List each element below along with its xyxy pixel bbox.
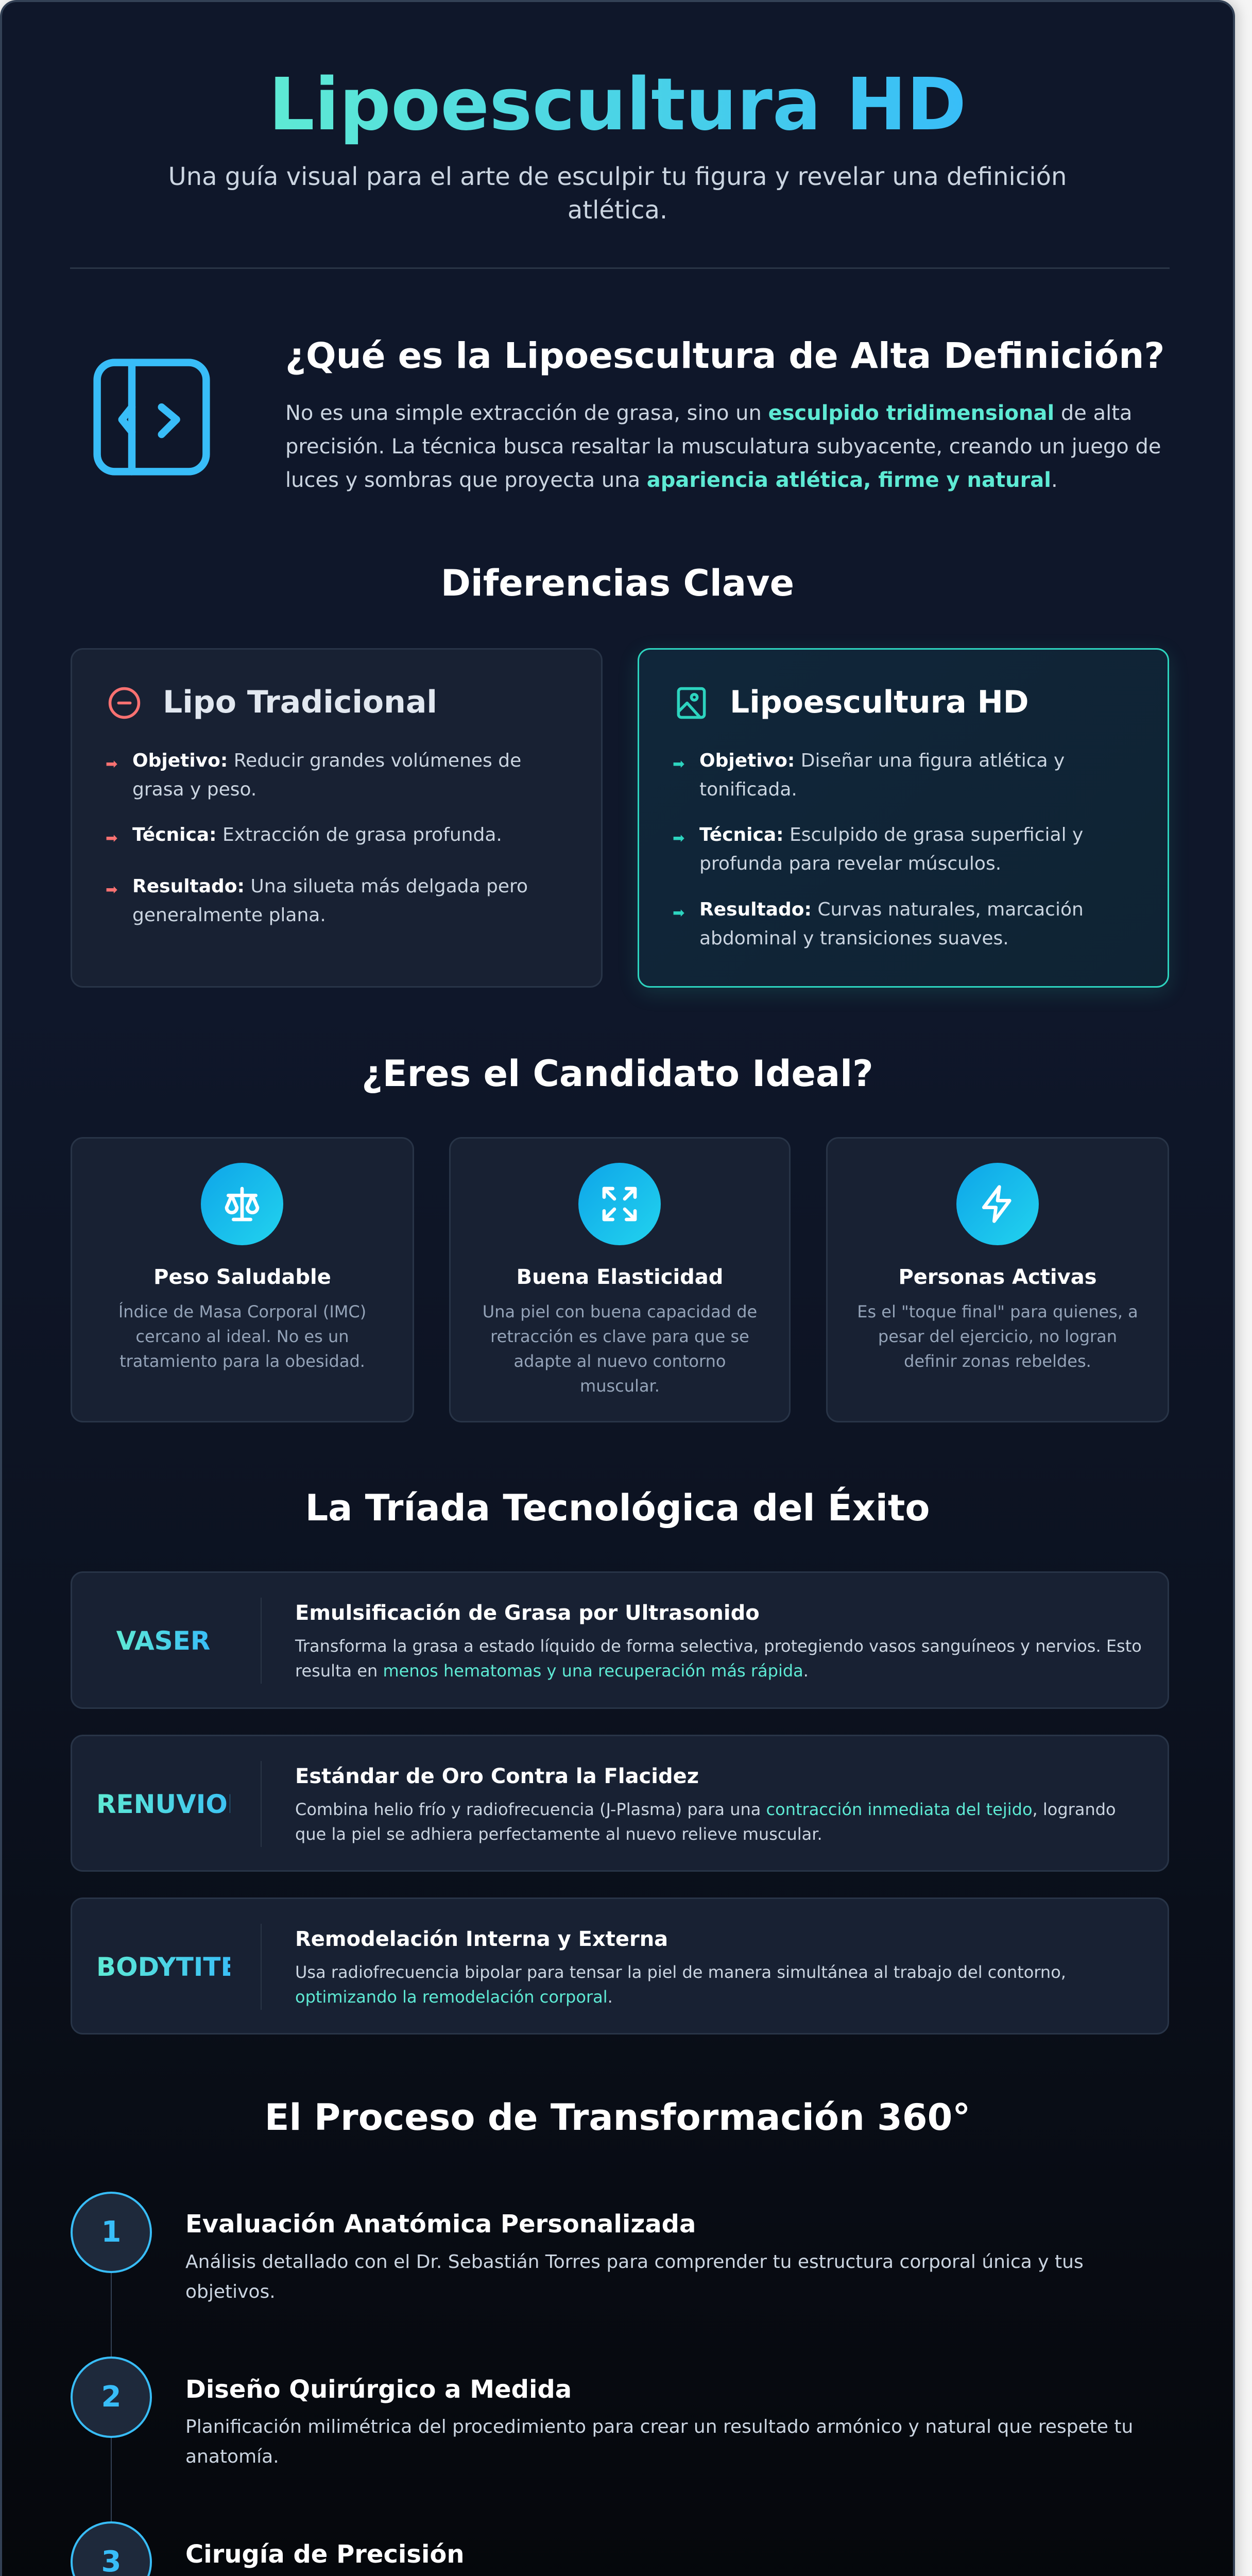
panel: buena elasticidad xyxy=(449,1137,791,1422)
list items: Objetivo: Reducir grandes volúmenes de xyxy=(132,750,521,771)
step 1 xyxy=(71,2192,1084,2302)
panel: lipoescultura HD xyxy=(638,648,1169,988)
desc: cercano al ideal. No es un xyxy=(135,1327,349,1346)
step 3: Cirugía de Precisión xyxy=(185,2540,465,2569)
list items xyxy=(673,750,1084,949)
desc: adapte al nuevo contorno xyxy=(514,1351,726,1371)
step 1: objetivos. xyxy=(185,2281,276,2302)
desc xyxy=(295,1962,1066,2007)
icon: expand xyxy=(578,1163,661,1245)
panel: lipo tradicional: ➡ xyxy=(106,881,117,898)
text: definition: No es una simple extracción de grasa, sino un esculpido tridimensional de alta xyxy=(285,401,1132,425)
desc: tratamiento para la obesidad. xyxy=(119,1351,365,1371)
desc xyxy=(857,1302,1138,1371)
step 3 xyxy=(71,2521,465,2576)
title: Peso Saludable xyxy=(153,1265,331,1289)
desc: optimizando la remodelación corporal. xyxy=(295,1987,613,2007)
title: Buena Elasticidad xyxy=(517,1265,723,1289)
desc xyxy=(295,1636,1142,1681)
desc: Índice de Masa Corporal (IMC) xyxy=(118,1302,366,1321)
desc xyxy=(118,1302,366,1371)
desc: Es el "toque final" para quienes, a xyxy=(857,1302,1138,1321)
title: Personas Activas xyxy=(898,1265,1097,1289)
list items: Resultado: Curvas naturales, marcación xyxy=(699,899,1084,920)
heading: candidato: ¿Eres el Candidato Ideal? xyxy=(362,1053,873,1095)
title: Lipoescultura HD xyxy=(269,63,966,147)
title: Remodelación Interna y Externa xyxy=(295,1927,668,1951)
panel: lipoescultura HD: ➡ xyxy=(673,904,684,921)
list items: abdominal y transiciones suaves. xyxy=(699,928,1009,949)
icon: image xyxy=(677,687,706,719)
desc: Una piel con buena capacidad de xyxy=(483,1302,757,1321)
list items: Resultado: Una silueta más delgada pero xyxy=(132,876,528,897)
desc: resulta en menos hematomas y una recuperación más rápida. xyxy=(295,1661,809,1681)
desc: Transforma la grasa a estado líquido de forma selectiva, protegiendo vasos sanguíneos y nervios. Esto xyxy=(295,1636,1142,1656)
desc xyxy=(295,1800,1116,1844)
icon: split square xyxy=(93,359,210,476)
title: Emulsificación de Grasa por Ultrasonido xyxy=(295,1601,760,1625)
panel: lipo tradicional: ➡ xyxy=(106,755,117,772)
subtitle: Una guía visual para el arte de esculpir tu figura y revelar una definición xyxy=(168,162,1067,191)
list items: Técnica: Esculpido de grasa superficial y xyxy=(699,824,1083,845)
list items: Objetivo: Diseñar una figura atlética y xyxy=(699,750,1065,771)
text: definition: precisión. La técnica busca resaltar la musculatura subyacente, creando un juego de xyxy=(285,435,1161,459)
list items: tonificada. xyxy=(699,779,797,800)
desc: pesar del ejercicio, no logran xyxy=(878,1327,1117,1346)
desc: retracción es clave para que se xyxy=(490,1327,749,1346)
panel: lipo tradicional: ➡ xyxy=(106,829,117,846)
panel: peso saludable xyxy=(71,1137,414,1422)
heading: proceso: El Proceso de Transformación 360° xyxy=(265,2096,970,2139)
heading: diferencias: Diferencias Clave xyxy=(441,562,794,604)
desc: Combina helio frío y radiofrecuencia (J-Plasma) para una contracción inmediata del tejido, logrando xyxy=(295,1800,1116,1819)
card title: Lipo Tradicional xyxy=(163,684,437,720)
desc: muscular. xyxy=(580,1376,660,1396)
step 2: Planificación milimétrica del procedimiento para crear un resultado armónico y natural que respete tu xyxy=(185,2416,1133,2437)
desc: definir zonas rebeldes. xyxy=(904,1351,1091,1371)
desc: Usa radiofrecuencia bipolar para tensar la piel de manera simultánea al trabajo del contorno, xyxy=(295,1962,1066,1982)
panel: RENUVION xyxy=(71,1735,1169,1872)
card title: Lipoescultura HD xyxy=(730,684,1029,720)
panel: BODYTITE xyxy=(71,1897,1169,2035)
title: Estándar de Oro Contra la Flacidez xyxy=(295,1765,699,1788)
step 2: Diseño Quirúrgico a Medida xyxy=(185,2375,572,2404)
list items: profunda para revelar músculos. xyxy=(699,853,1001,874)
text: definition: luces y sombras que proyecta una apariencia atlética, firme y natural. xyxy=(285,468,1058,492)
panel: VASER xyxy=(71,1571,1169,1709)
panel: lipo tradicional xyxy=(71,648,603,988)
step 2: anatomía. xyxy=(185,2446,279,2467)
subtitle: atlética. xyxy=(568,196,667,225)
list items xyxy=(106,750,528,926)
icon: lightning xyxy=(956,1163,1039,1245)
desc xyxy=(483,1302,757,1396)
text: definition xyxy=(285,401,1161,492)
heading: what is: ¿Qué es la Lipoescultura de Alta Definición? xyxy=(285,335,1164,377)
panel: personas activas xyxy=(826,1137,1169,1422)
panel: lipoescultura HD: ➡ xyxy=(673,829,684,846)
step 1: Evaluación Anatómica Personalizada xyxy=(185,2210,696,2239)
list items: grasa y peso. xyxy=(132,779,256,800)
list items: generalmente plana. xyxy=(132,905,326,926)
step 1: Análisis detallado con el Dr. Sebastián Torres para comprender tu estructura corporal única y tus xyxy=(185,2251,1084,2273)
icon: scale xyxy=(201,1163,283,1245)
heading: triada: La Tríada Tecnológica del Éxito xyxy=(305,1487,930,1529)
list items: Técnica: Extracción de grasa profunda. xyxy=(132,824,502,845)
subtitle xyxy=(168,162,1067,225)
panel: lipoescultura HD: ➡ xyxy=(673,755,684,772)
step 2 xyxy=(71,2357,1133,2467)
step 2: 2 xyxy=(101,2380,121,2414)
icon: minus circle xyxy=(108,687,140,719)
desc: que la piel se adhiera perfectamente al nuevo relieve muscular. xyxy=(295,1824,822,1844)
step 1: 1 xyxy=(101,2215,121,2249)
